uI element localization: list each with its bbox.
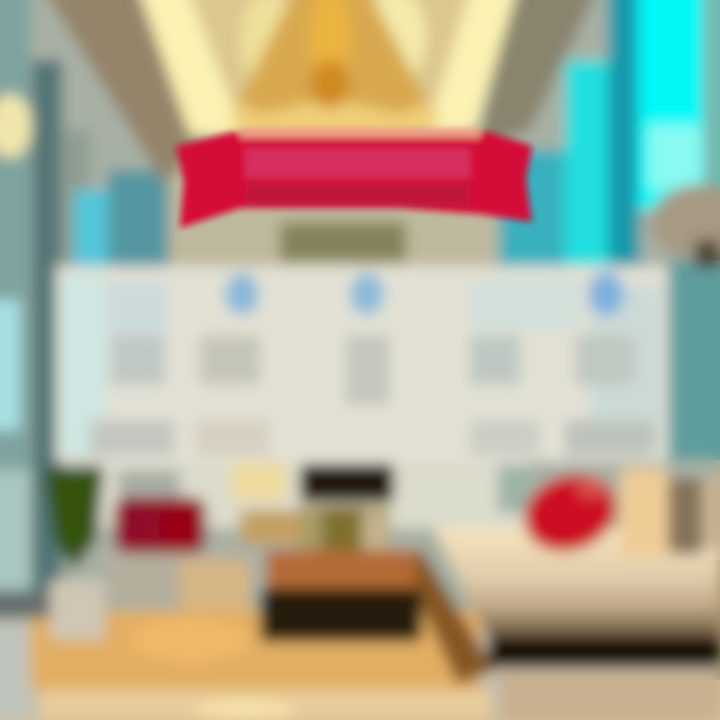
red cushion on sofa <box>513 462 627 564</box>
column 1 <box>62 275 175 456</box>
ceiling with light coves <box>25 0 612 185</box>
column 2 <box>195 335 270 456</box>
pendant lamp right <box>650 184 720 268</box>
column 4 <box>470 280 580 456</box>
icon: column 5 blue circle <box>588 272 624 316</box>
chandelier <box>230 0 440 142</box>
icon: column 3 blue circle <box>350 273 384 315</box>
plant <box>44 468 104 570</box>
left seating area <box>50 552 250 640</box>
lower wall <box>100 462 532 528</box>
floor <box>0 610 720 720</box>
sofa <box>434 468 720 668</box>
wall behind banner <box>170 170 495 270</box>
coffee table with books <box>260 464 495 685</box>
icon: column 2 blue circle <box>225 273 259 315</box>
decor beside table <box>232 462 305 544</box>
red title banner <box>176 128 532 228</box>
red cushions left <box>114 497 206 553</box>
column 5 <box>565 285 660 456</box>
panel: white information board <box>56 266 668 462</box>
left window base <box>0 590 50 618</box>
wall plaque under banner <box>280 222 406 262</box>
wall lamp left <box>0 94 32 158</box>
column 3 <box>345 335 390 405</box>
